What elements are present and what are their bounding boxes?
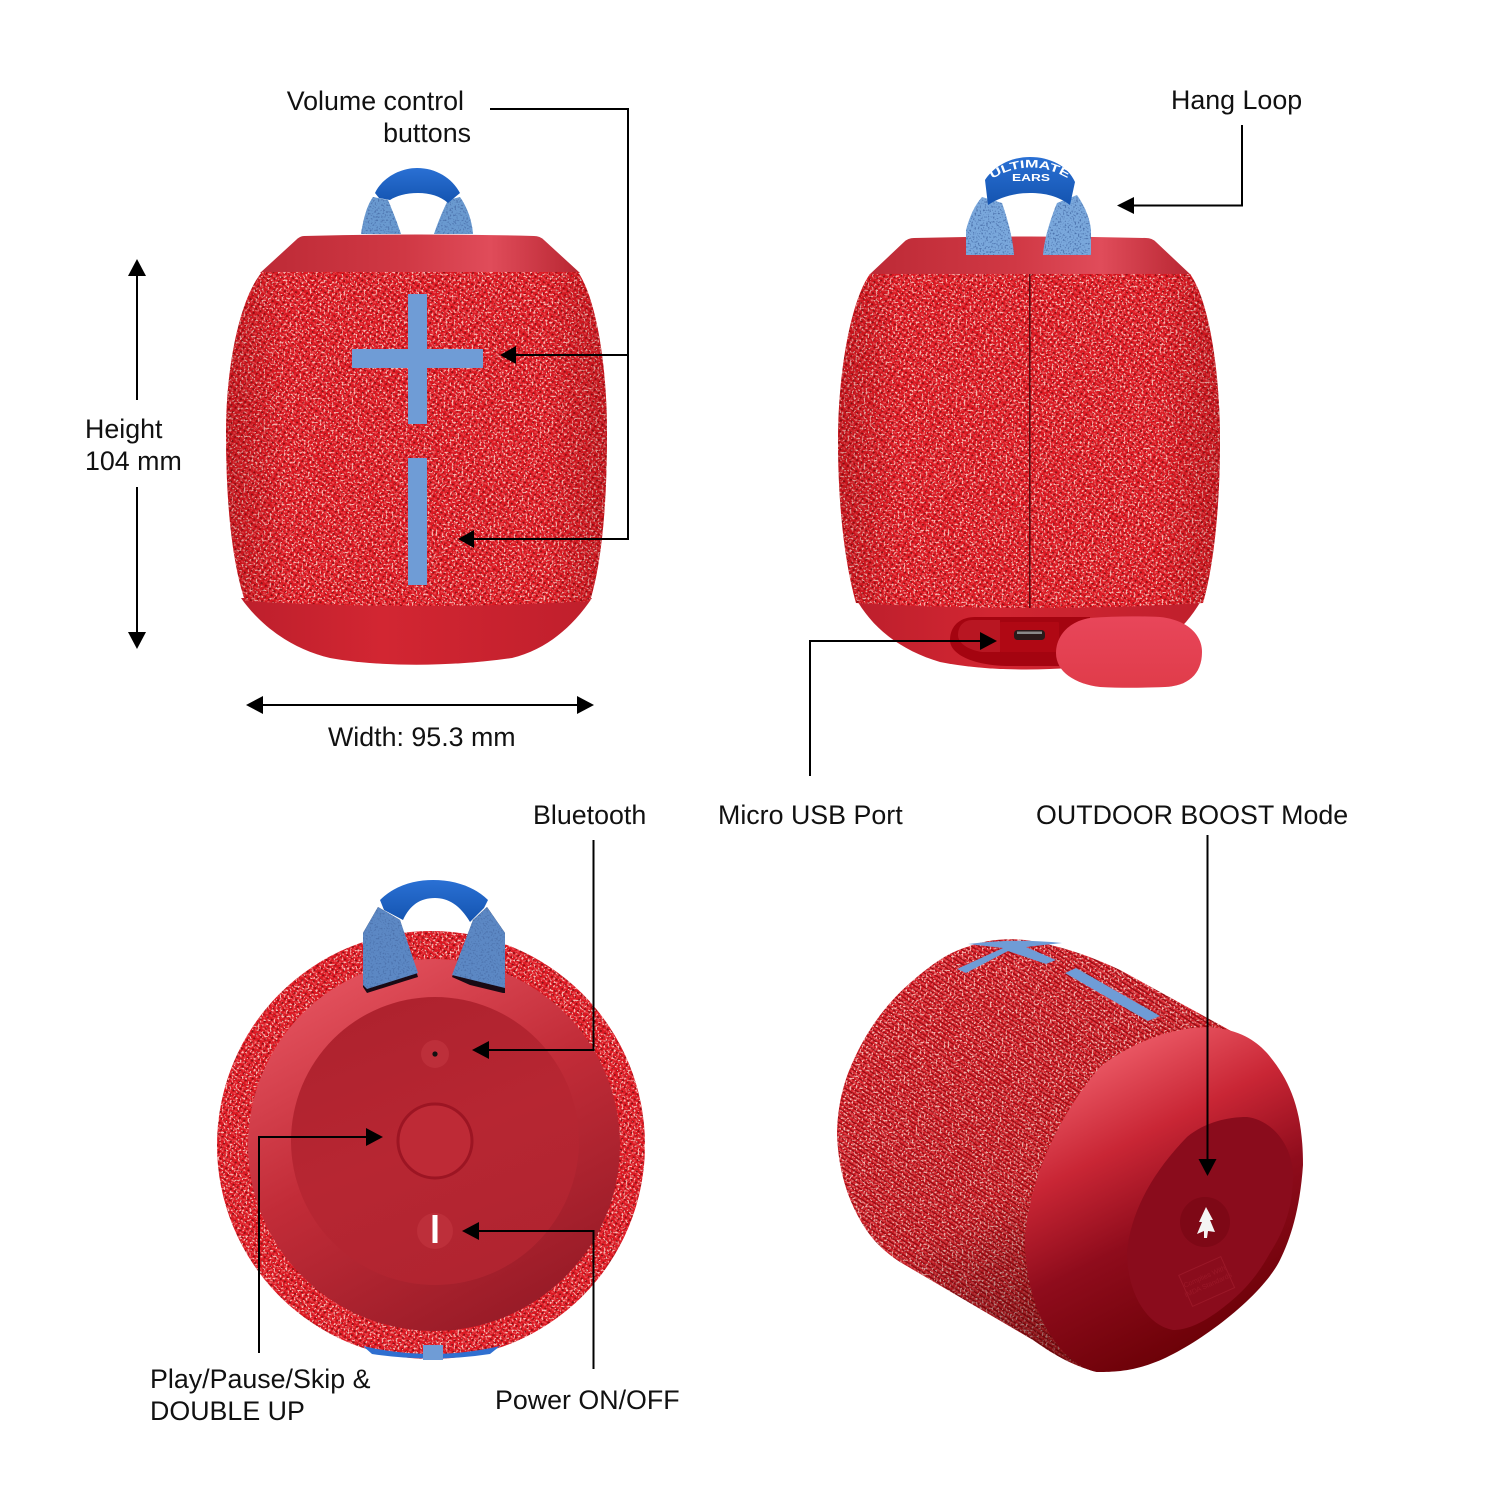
callout arrow: Bluetooth <box>472 840 594 1059</box>
embossed regulatory marking <box>1176 1255 1237 1307</box>
label: Height: 104 mm <box>85 446 182 476</box>
speaker: angled view <box>837 939 1303 1372</box>
embossed regulatory marking: IMDA Standards <box>1184 1272 1234 1299</box>
fabric edge shading <box>838 274 1220 608</box>
inner disc <box>1127 1117 1293 1330</box>
callout arrow: power <box>462 1222 594 1369</box>
power button <box>417 1213 453 1249</box>
minus control <box>1065 968 1160 1021</box>
callout arrows: volume control <box>458 109 628 548</box>
bottom cap <box>855 597 1203 670</box>
handle <box>363 880 505 993</box>
minus button <box>408 458 427 585</box>
hang loop, front view <box>361 168 473 234</box>
embossed regulatory marking: Complies With <box>1183 1265 1227 1290</box>
label: Volume control buttons: buttons <box>383 118 471 148</box>
label: Hang Loop: Hang Loop <box>1171 85 1302 115</box>
callout arrow: hang loop <box>1117 125 1242 214</box>
label: Play/Pause/Skip and Double Up: Play/Pause/Skip & <box>150 1364 371 1394</box>
hang loop, back view: ULTIMATE <box>990 160 1068 178</box>
fabric body <box>226 272 607 606</box>
label: Height <box>85 414 182 476</box>
plus button <box>352 294 483 424</box>
USB cover <box>1056 616 1202 688</box>
label: Bluetooth: Bluetooth <box>533 800 646 830</box>
bottom strap <box>363 1345 500 1360</box>
center seam <box>1029 274 1031 608</box>
fabric body <box>838 274 1220 608</box>
label: Height: Height <box>85 414 163 444</box>
label: Micro USB Port: Micro USB Port <box>718 800 903 830</box>
label: Volume control buttons <box>287 86 471 148</box>
dimension arrow: height <box>128 259 146 649</box>
dimension arrow: width <box>246 696 594 714</box>
label: Width: Width: 95.3 mm <box>328 722 516 752</box>
bottom cap <box>241 598 592 665</box>
callout arrow: play/pause <box>259 1128 383 1353</box>
hang loop, back view: EARS <box>1012 172 1050 184</box>
outer cap <box>248 959 620 1331</box>
top cap <box>869 236 1191 275</box>
label: Outdoor Boost Mode: OUTDOOR BOOST Mode <box>1036 800 1348 830</box>
play button <box>398 1104 472 1178</box>
label: Play/Pause/Skip and Double Up: DOUBLE UP <box>150 1396 305 1426</box>
inner recess <box>291 997 579 1285</box>
callout arrow: micro USB <box>810 632 997 776</box>
top cap <box>260 234 580 273</box>
speaker: back view <box>838 157 1220 688</box>
Bluetooth indicator <box>421 1040 449 1068</box>
speaker: front view <box>226 168 607 665</box>
speaker: top view <box>217 880 645 1360</box>
callout arrow: Outdoor Boost <box>1198 835 1216 1176</box>
body shading <box>837 939 1262 1372</box>
label: Play/Pause/Skip and Double Up <box>150 1364 371 1426</box>
fabric edge shading <box>226 272 607 606</box>
cross control <box>957 941 1062 973</box>
label: Power ON/OFF: Power ON/OFF <box>495 1385 680 1415</box>
label: Volume control buttons: Volume control <box>287 86 464 116</box>
hang loop, back view <box>966 157 1091 255</box>
USB recess <box>950 617 1090 666</box>
USB port <box>1000 622 1059 652</box>
fabric body <box>837 939 1262 1372</box>
Outdoor Boost button <box>1180 1197 1230 1247</box>
fabric disc <box>217 931 645 1359</box>
end cap <box>1025 1027 1303 1372</box>
